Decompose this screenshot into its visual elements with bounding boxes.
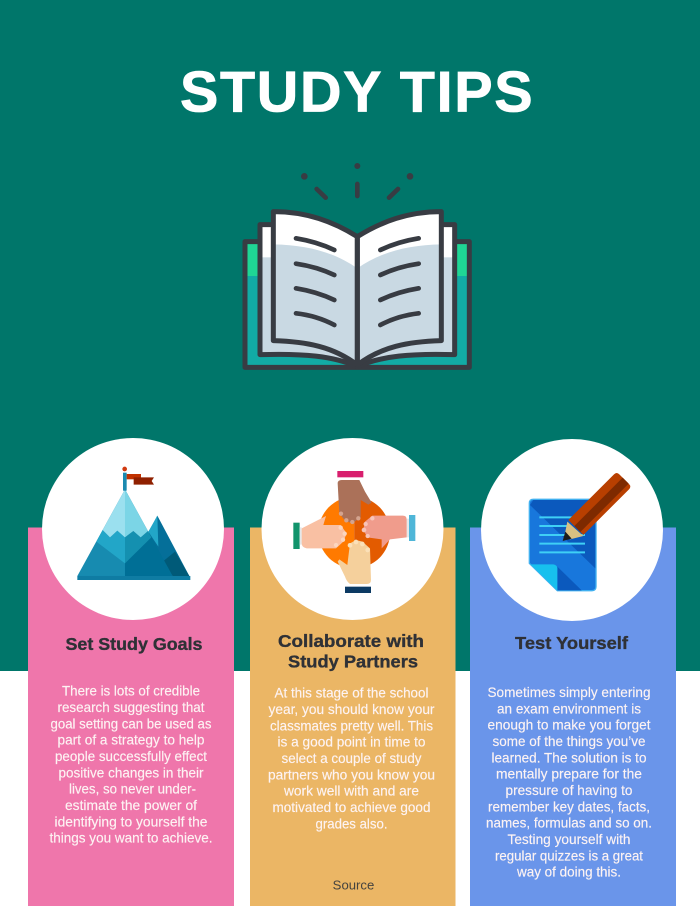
body text: motivated to achieve good — [272, 799, 430, 815]
heading — [278, 631, 424, 672]
body text: There is lots of credible — [62, 683, 200, 699]
body text: identifying to yourself the — [54, 813, 208, 829]
body text — [268, 685, 435, 831]
body text: partners who you know you — [268, 766, 435, 782]
heading: Test Yourself — [515, 633, 628, 653]
body text: lives, so never under- — [69, 781, 196, 797]
body text: At this stage of the school — [274, 685, 428, 701]
body text: work well with and are — [283, 783, 419, 799]
body text: Sometimes simply entering — [488, 684, 650, 700]
title: STUDY TIPS — [180, 60, 533, 124]
body text: an exam environment is — [497, 700, 641, 716]
source link: Source — [333, 878, 374, 893]
body text: select a couple of study — [282, 750, 422, 766]
icon circle: hands — [262, 438, 444, 620]
icon circle: document and pencil — [481, 439, 663, 621]
body text: goal setting can be used as — [50, 715, 212, 731]
body text: year, you should know your — [268, 701, 435, 717]
body text: mentally prepare for the — [496, 766, 642, 782]
body text: estimate the power of — [65, 797, 197, 813]
body text: pressure of having to — [506, 782, 633, 798]
body text: people successfully effect — [55, 748, 207, 764]
body text: grades also. — [316, 815, 388, 831]
body text: Testing yourself with — [508, 831, 630, 847]
heading: Set Study Goals — [66, 634, 203, 654]
body text: is a good point in time to — [278, 734, 426, 750]
teal header background — [0, 0, 700, 671]
body text: way of doing this. — [516, 864, 621, 880]
body text: positive changes in their — [58, 764, 204, 780]
body text: regular quizzes is a great — [495, 847, 643, 863]
heading: Collaborate with — [278, 631, 424, 651]
body text: classmates pretty well. This — [270, 717, 433, 733]
body text: things you want to achieve. — [50, 830, 212, 846]
body text: learned. The solution is to — [492, 749, 647, 765]
body text: names, formulas and so on. — [486, 815, 652, 831]
heading: Study Partners — [288, 652, 418, 672]
panel: set study goals — [28, 438, 234, 906]
body text: remember key dates, facts, — [488, 798, 650, 814]
body text — [486, 684, 652, 880]
icon circle: mountain — [42, 438, 224, 620]
panel: test yourself — [470, 439, 676, 906]
body text: part of a strategy to help — [58, 732, 205, 748]
body text: enough to make you forget — [488, 717, 651, 733]
icon: open book — [245, 163, 469, 367]
body text: research suggesting that — [58, 699, 205, 715]
body text — [50, 683, 212, 846]
body text: some of the things you’ve — [492, 733, 646, 749]
panel: collaborate with study partners — [250, 438, 456, 906]
